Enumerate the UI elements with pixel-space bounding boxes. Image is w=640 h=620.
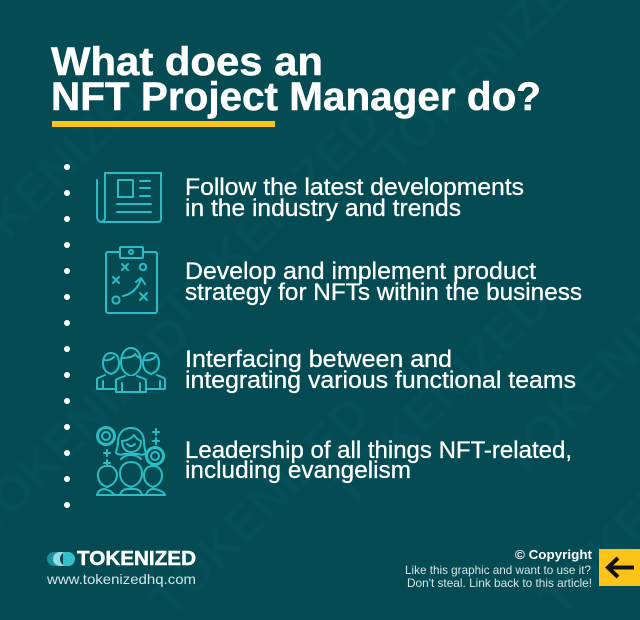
text: follow developments (185, 174, 524, 222)
copyright heading: © Copyright (515, 547, 593, 562)
title underline (52, 121, 275, 127)
copyright note: Don't steal. Link back to this article! (407, 576, 592, 590)
icon: strategy clipboard (106, 247, 157, 313)
title: What does an (51, 40, 323, 84)
text: functional teams: integrating various functional teams (185, 367, 576, 394)
icon: leadership group (97, 428, 165, 495)
text: functional teams: Interfacing between and (185, 346, 452, 373)
title (51, 40, 541, 119)
text: product strategy: strategy for NFTs within the business (185, 279, 582, 306)
logo mark (47, 552, 75, 566)
background watermark: TOKENIZED (318, 275, 561, 518)
dotted vertical line (64, 164, 70, 508)
text: product strategy: Develop and implement product (185, 258, 536, 285)
text: product strategy (185, 258, 582, 306)
title: NFT Project Manager do? (51, 75, 541, 119)
text: leadership (185, 437, 572, 484)
copyright note: Like this graphic and want to use it? (405, 563, 591, 577)
text: leadership: including evangelism (185, 457, 411, 484)
icon: yellow arrow box (599, 549, 640, 586)
text: functional teams (185, 346, 576, 394)
icon: newspaper (97, 173, 161, 222)
text: follow developments: in the industry and trends (185, 195, 461, 222)
icon: team (97, 348, 165, 392)
logo wordmark: TOKENIZED (77, 548, 196, 570)
text: leadership: Leadership of all things NFT-related, (185, 437, 572, 464)
copyright note (405, 563, 592, 590)
text: follow developments: Follow the latest developments (185, 174, 524, 201)
background watermark: TOKENIZED (148, 95, 391, 338)
website url: www.tokenizedhq.com (46, 571, 196, 587)
